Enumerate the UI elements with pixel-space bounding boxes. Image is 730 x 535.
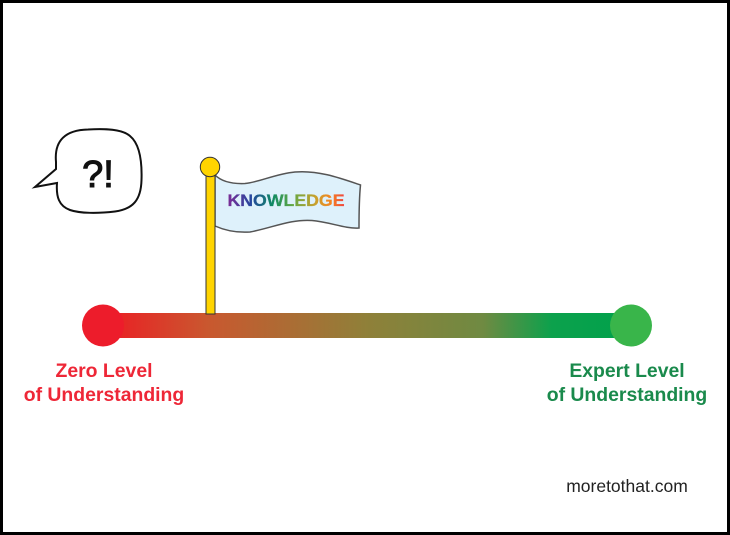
expert label: of Understanding — [547, 384, 707, 406]
expert label — [547, 360, 707, 406]
flag pole — [200, 157, 220, 314]
progress bar — [103, 313, 631, 338]
zero label: Zero Level — [56, 360, 152, 382]
zero label — [24, 360, 184, 406]
bubble text: ?! — [82, 154, 114, 196]
zero label: of Understanding — [24, 384, 184, 406]
pole ball — [200, 157, 220, 177]
expert marker — [610, 304, 652, 346]
flag cloth — [215, 172, 360, 232]
expert label: Expert Level — [569, 360, 685, 382]
zero marker — [82, 304, 124, 346]
flag label: KNOWLEDGE — [228, 191, 344, 210]
flag — [215, 172, 360, 232]
website credit: moretothat.com — [566, 476, 688, 496]
speech bubble — [35, 129, 142, 213]
